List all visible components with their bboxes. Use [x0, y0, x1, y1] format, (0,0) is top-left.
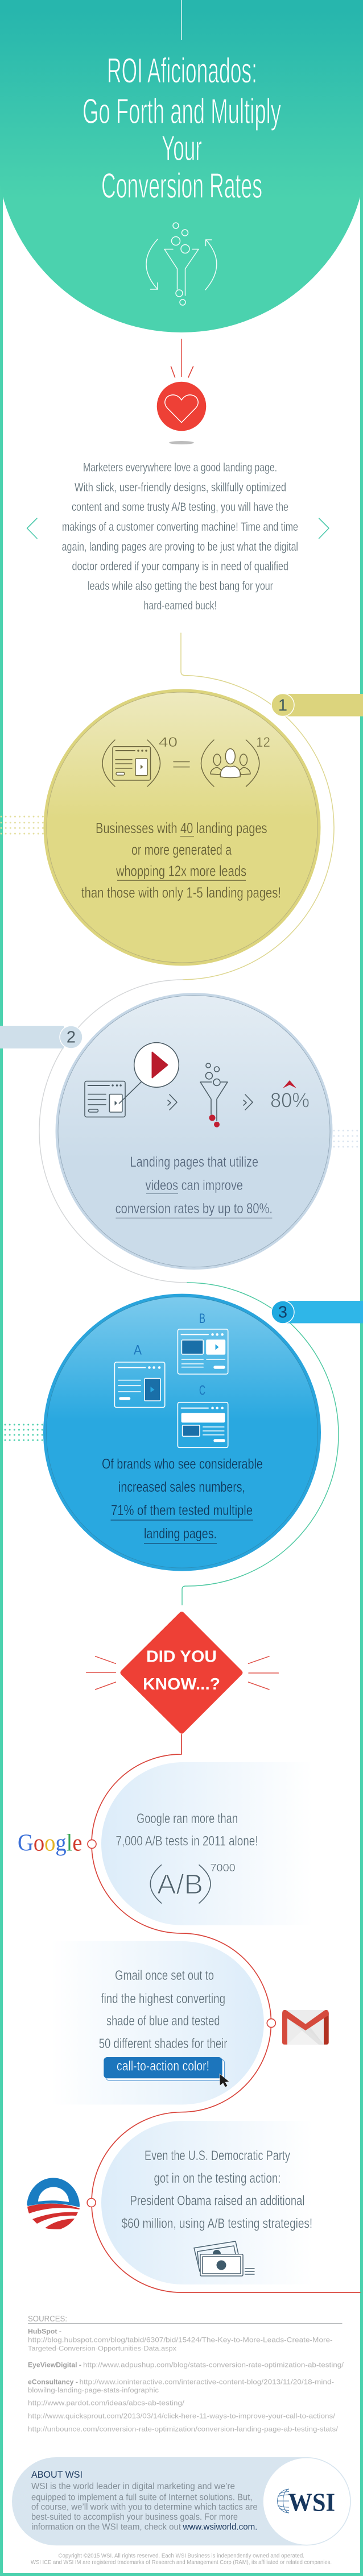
number badge 1: 1: [278, 697, 287, 715]
icon: landing page equals leads: [102, 740, 259, 786]
fact text: Gmail once set out to: [115, 1968, 214, 1983]
panel: stat 2 blue-grey circle: 80%: [270, 1089, 310, 1112]
number badge 1: [271, 693, 363, 716]
stat text: [102, 1456, 263, 1543]
dots: [334, 1130, 361, 1147]
copyright: [31, 2553, 332, 2566]
icon: money: [194, 2241, 255, 2276]
intro text block: hard-earned buck!: [144, 600, 217, 613]
stat text: Of brands who see considerable: [102, 1456, 263, 1472]
panel: stat 3 blue circle: [5, 1294, 363, 1571]
title: ROI Aficionados:: [107, 51, 257, 91]
connector: red timeline: [92, 1734, 360, 2292]
exponent labels: [159, 735, 270, 750]
icon: red heart bulb: [157, 339, 206, 444]
icon: video page to funnel to 80 percent: [85, 1043, 253, 1121]
intro text block: makings of a customer converting machine! Time and time: [62, 521, 298, 534]
formula: A/B: [157, 1870, 203, 1900]
sources: http://www.pardot.com/ideas/abcs-ab-testing/: [28, 2400, 185, 2407]
fact text: Even the U.S. Democratic Party: [145, 2148, 290, 2163]
sources: http://www.adpushup.com/blog/stats-conversion-rate-optimization-ab-testing/: [83, 2362, 344, 2369]
node: [87, 2198, 96, 2207]
exponent labels: 12: [256, 735, 270, 750]
about heading: ABOUT WSI: [31, 2469, 82, 2480]
logo: Obama: [27, 2178, 80, 2229]
title: [82, 51, 281, 206]
connector: green line: [182, 1283, 339, 1605]
sources: http://www.ioninteractive.com/interactive-content-blog/2013/11/20/18-mind-: [80, 2379, 334, 2386]
sources: http://blog.hubspot.com/blog/tabid/6307/bid/15424/The-Key-to-More-Leads-Create-More-: [28, 2337, 333, 2344]
intro text block: content and some trusty A/B testing, you will have the: [72, 501, 288, 514]
intro text block: [62, 461, 298, 613]
intro text block: again, landing pages are proving to be just what the digital: [62, 540, 298, 554]
did you know diamond: KNOW...?: [143, 1675, 220, 1693]
fact text: shade of blue and tested: [106, 2013, 220, 2029]
formula: 7000: [210, 1862, 236, 1874]
sources: [28, 2315, 344, 2433]
sources: EyeViewDigital -: [28, 2362, 81, 2369]
copyright: WSI ICE and WSI IM are registered trademarks of Research and Management Corp (RAM), its affiliated or related companies.: [31, 2560, 332, 2566]
icon: page variant A: [114, 1343, 165, 1407]
logo circle: WSI: [263, 2458, 350, 2545]
dots: [1, 817, 44, 834]
icon: right chevron: [319, 518, 329, 539]
intro text block: doctor ordered if your company is in need of qualified: [72, 560, 288, 573]
fact: Google: [18, 1811, 258, 1903]
stat text: [116, 1154, 273, 1218]
number badge 2: 2: [67, 1029, 76, 1047]
fact text: [122, 2148, 312, 2232]
logo: Google: Google: [18, 1830, 82, 1857]
stat text: conversion rates by up to 80%.: [116, 1201, 273, 1217]
stat text: whopping 12x more leads: [116, 862, 246, 879]
call to action button: [104, 2057, 225, 2080]
fact panel backgrounds: [51, 1762, 324, 2284]
intro text block: Marketers everywhere love a good landing page.: [83, 461, 277, 475]
icon: page variant C: [178, 1383, 228, 1447]
node: [267, 2019, 275, 2028]
logo: Gmail: [282, 2010, 329, 2045]
sources: SOURCES:: [28, 2315, 67, 2324]
header semicircle: [0, 0, 363, 332]
about text: [31, 2482, 258, 2532]
stat text: 71% of them tested multiple: [111, 1503, 253, 1518]
stat text: landing pages.: [144, 1526, 217, 1542]
sources: Targeted-Conversion-Opportunities-Data.aspx: [28, 2346, 176, 2353]
number badge 3: [271, 1301, 363, 1324]
copyright: Copyright ©2015 WSI. All rights reserved. Each WSI Business is independently owned and operated.: [58, 2553, 304, 2560]
about text: information on the WSI team, check out: [31, 2523, 182, 2532]
stat text: or more generated a: [131, 841, 232, 858]
did you know diamond: [86, 1612, 278, 1734]
fact: Gmail: [99, 1968, 329, 2087]
fact text: $60 million, using A/B testing strategies!: [122, 2216, 312, 2232]
dots: [5, 1425, 44, 1440]
formula: [150, 1862, 236, 1903]
title: Your: [162, 129, 202, 168]
exponent labels: 40: [159, 735, 178, 750]
icon: cursor: [220, 2074, 229, 2087]
did you know diamond: DID YOU: [146, 1647, 217, 1666]
fact text: Google ran more than: [137, 1811, 238, 1826]
sources: eConsultancy -: [28, 2379, 78, 2386]
about text: of course, we’ll work with you to determine which tactics are: [31, 2503, 258, 2512]
sources: blowilng-landing-page-stats-infographic: [28, 2387, 159, 2394]
stat text: Landing pages that utilize: [130, 1154, 258, 1170]
stat text: videos can improve: [146, 1177, 243, 1193]
fact: Obama: [27, 2148, 312, 2276]
stat text: increased sales numbers,: [118, 1479, 245, 1495]
fact text: [99, 1968, 228, 2051]
about text: www.wsiworld.com.: [182, 2523, 257, 2532]
sources: http://www.quicksprout.com/2013/03/14/click-here-11-ways-to-improve-your-call-to-actions/: [28, 2413, 336, 2420]
panel: stat 2 blue-grey circle: [0, 993, 361, 1270]
icon: page variant B: [178, 1311, 228, 1374]
connector: yellow line: [181, 633, 334, 980]
icon: page variant B: B: [199, 1311, 205, 1326]
fact text: [116, 1811, 258, 1849]
about text: best-suited to accomplish your business goals. For more: [31, 2512, 238, 2522]
intro text block: With slick, user-friendly designs, skillfully optimized: [75, 481, 286, 494]
fact text: President Obama raised an additional: [130, 2194, 304, 2209]
icon: page variant A: A: [134, 1343, 142, 1358]
call to action button: call-to-action color!: [117, 2058, 209, 2074]
icon: page variant C: C: [199, 1383, 205, 1399]
sources: HubSpot -: [28, 2329, 61, 2336]
about text: equipped to implement a full suite of Internet solutions. But,: [31, 2492, 253, 2502]
node: [88, 1840, 96, 1848]
stat text: Businesses with 40 landing pages: [96, 819, 267, 837]
icon: left chevron: [27, 518, 37, 539]
panel: stat 1 yellow circle: [1, 689, 363, 966]
icon: funnel with arrows: [146, 223, 217, 305]
panel: about WSI: [12, 2457, 350, 2545]
number badge 2: [0, 1026, 82, 1048]
stat text: [81, 819, 281, 901]
fact text: 7,000 A/B tests in 2011 alone!: [116, 1834, 258, 1849]
connector: grey line: [39, 980, 187, 1283]
logo circle: WSI: WSI: [288, 2488, 335, 2516]
burst rays: [86, 1657, 278, 1689]
sources: http://unbounce.com/conversion-rate-optimization/conversion-landing-page-ab-testing-stats/: [28, 2426, 339, 2433]
intro text block: leads while also getting the best bang for your: [88, 580, 273, 593]
about text: WSI is the world leader in digital marketing and we’re: [31, 2482, 235, 2491]
fact text: find the highest converting: [101, 1991, 225, 2007]
number badge 3: 3: [278, 1304, 287, 1322]
fact text: got in on the testing action:: [154, 2171, 281, 2186]
fact text: 50 different shades for their: [99, 2036, 228, 2051]
stat text: than those with only 1-5 landing pages!: [81, 884, 281, 901]
